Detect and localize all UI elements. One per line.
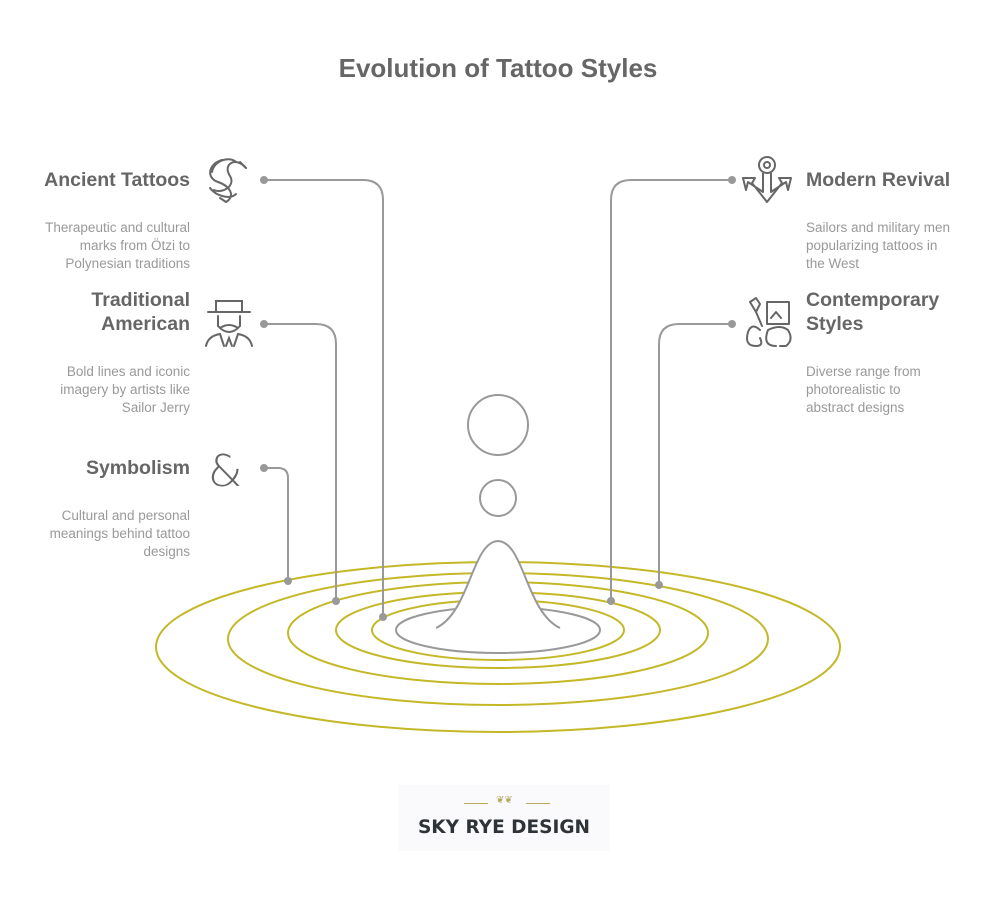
connectors (264, 180, 732, 617)
panel: Modern Revival (806, 169, 950, 271)
text: marks from Ötzi to (80, 238, 190, 253)
heading: Contemporary (806, 289, 939, 311)
text: Sailors and military men (806, 220, 950, 235)
text: imagery by artists like (60, 382, 190, 397)
icon: anchor (743, 157, 791, 202)
text: photorealistic to (806, 382, 901, 397)
panel: Symbolism (50, 457, 190, 559)
heading (91, 289, 190, 335)
text: Bold lines and iconic (67, 364, 190, 379)
title: Evolution of Tattoo Styles (339, 53, 657, 83)
text: Diverse range from (806, 364, 921, 379)
ripple rings (156, 562, 840, 732)
heading (806, 289, 940, 335)
heading: Symbolism (86, 457, 190, 479)
text: Sailor Jerry (122, 400, 190, 415)
heading: Styles (806, 313, 863, 335)
droplet splash (396, 395, 600, 653)
panel: Traditional American (60, 289, 190, 415)
heading: Ancient Tattoos (44, 169, 190, 191)
text (806, 364, 921, 415)
logo: ❦❦ (496, 795, 513, 806)
text (60, 364, 190, 415)
text: Therapeutic and cultural (45, 220, 190, 235)
logo: SKY RYE DESIGN (418, 817, 590, 838)
text: the West (806, 256, 859, 271)
panel: Contemporary Styles (806, 289, 940, 415)
panel: Ancient Tattoos (44, 169, 190, 271)
heading: Traditional (91, 289, 190, 311)
heading: Modern Revival (806, 169, 950, 191)
text: meanings behind tattoo (50, 526, 190, 541)
text: Cultural and personal (62, 508, 190, 523)
text (45, 220, 190, 271)
logo (398, 785, 610, 851)
text (50, 508, 190, 559)
icon: man with hat (206, 301, 252, 346)
icon: art brush and elephant (747, 298, 791, 346)
icon: snakes (210, 159, 246, 202)
text: popularizing tattoos in (806, 238, 937, 253)
icon: ampersand: & (208, 446, 242, 497)
text: Polynesian traditions (65, 256, 190, 271)
text: designs (143, 544, 190, 559)
heading: American (101, 313, 190, 335)
text: abstract designs (806, 400, 904, 415)
text (806, 220, 950, 271)
